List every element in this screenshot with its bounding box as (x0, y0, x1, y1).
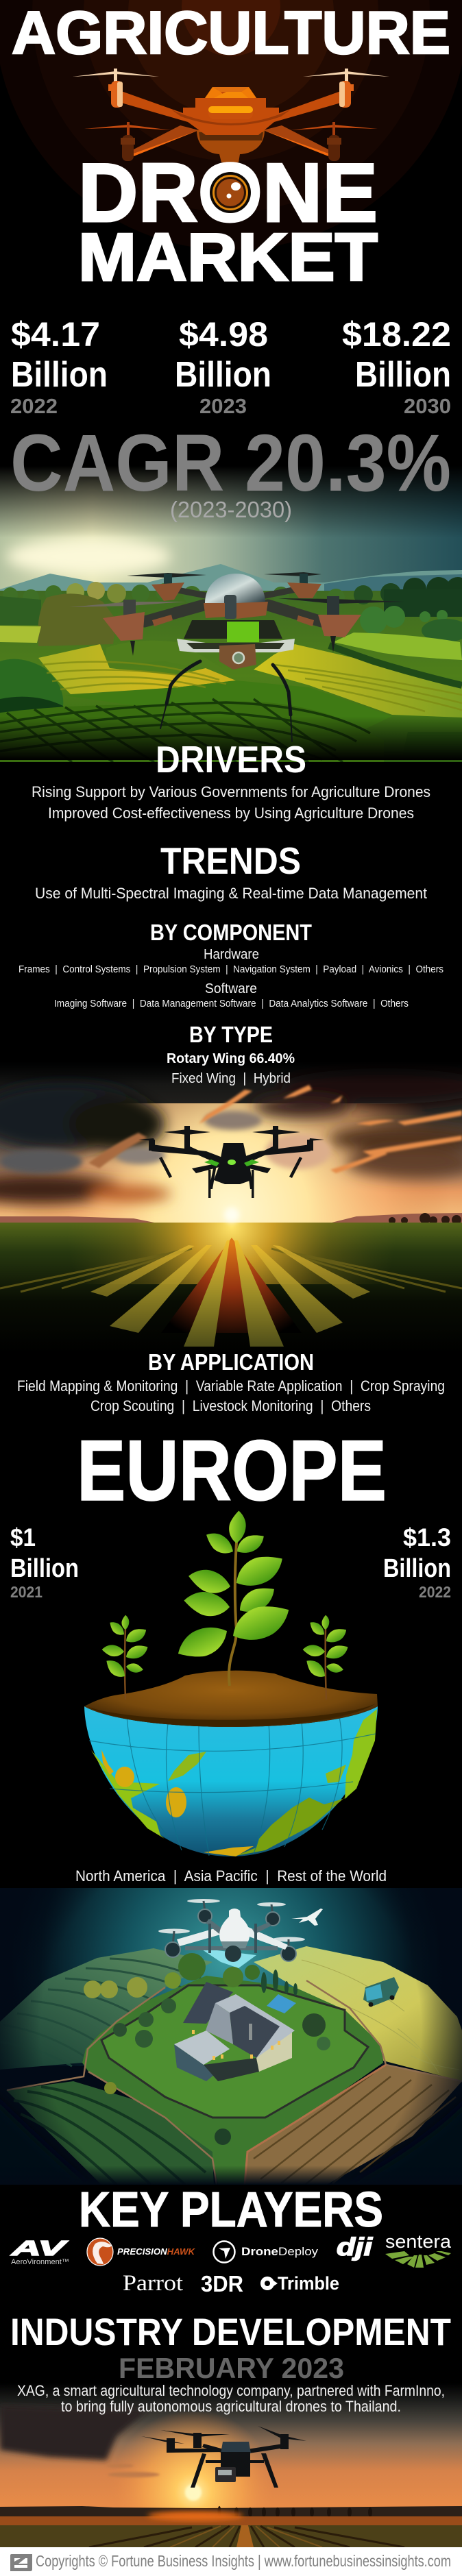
collar right (236, 602, 268, 619)
icon: Fortune Business Insights logo (10, 2554, 32, 2571)
sun (224, 1207, 239, 1223)
logo: AeroVironment: AV (10, 2236, 68, 2260)
trees (84, 1953, 330, 2145)
stat: 2022: 2022 (10, 394, 58, 418)
centre row glow (236, 2525, 254, 2547)
front motors (108, 81, 354, 108)
farmland base (0, 591, 462, 762)
text: drivers list (32, 783, 430, 822)
right sapling (302, 1615, 350, 1700)
right bushes (360, 606, 462, 642)
sky glow (0, 1103, 462, 1224)
panel: company logos (10, 2231, 452, 2296)
stat: 2030: Billion (355, 355, 451, 395)
panel: drone at sunset scene (0, 2383, 462, 2547)
logo: PrecisionHawk (87, 2238, 196, 2266)
drone: hovering silhouette (141, 2426, 306, 2488)
stat: Europe 2021 (10, 1523, 79, 1601)
panel: header background glow (0, 0, 462, 548)
logo: DJI: dji (337, 2233, 373, 2261)
hedge row (329, 646, 462, 685)
navy background (0, 1888, 462, 2185)
heading: Key players: KEY PLAYERS (79, 2183, 383, 2237)
crop rows (90, 1240, 370, 1347)
thin clouds (106, 2464, 160, 2477)
stat: 2022: $4.17 (11, 315, 100, 354)
sun glow (103, 2412, 288, 2508)
green band (65, 680, 392, 733)
rear rotors (84, 122, 378, 136)
stat: 2023 (175, 315, 271, 418)
text: drivers list: Improved Cost-effectiveness by Using Agriculture Drones (48, 805, 414, 822)
upper left yellow field (38, 644, 236, 694)
front arms and body (121, 87, 341, 135)
teal glow (0, 1888, 462, 2066)
left bush (0, 659, 63, 706)
text: drivers list: Rising Support by Various Governments for Agriculture Drones (32, 783, 430, 800)
text: application list (17, 1377, 445, 1414)
text: software segment: Imaging Software | Data Management Software | Data Analytics Software | Others (54, 998, 409, 1009)
panel: market size stats (10, 315, 451, 418)
treeline (3, 577, 462, 606)
bottom fade (0, 2166, 462, 2185)
right yellow field (254, 1946, 462, 2081)
icon: small plane (291, 1909, 323, 1926)
bowl shading (199, 132, 263, 140)
text: development description (17, 2382, 445, 2415)
olive tree clump (38, 593, 117, 646)
logo: Sentera (385, 2231, 452, 2268)
text: hardware segment (19, 947, 443, 975)
stat: 2023: 2023 (199, 394, 247, 418)
sky (0, 1061, 462, 1224)
panel: sunset field scene with drone (0, 1061, 462, 1354)
icon: orange drone illustration (73, 69, 389, 162)
panel: isometric farm scene with drone (0, 1888, 462, 2193)
continents (91, 1709, 377, 1856)
stat: Europe 2022 (383, 1523, 451, 1601)
front blades (73, 69, 389, 82)
blades (69, 572, 404, 607)
heading: By component: BY COMPONENT (150, 920, 312, 945)
stat: 2022 (10, 315, 108, 418)
stat: Europe 2021: Billion (10, 1554, 79, 1583)
text: software segment: Software (205, 981, 257, 996)
logo: Parrot: Parrot (123, 2271, 183, 2296)
text: hardware segment: Hardware (204, 947, 259, 962)
distant hills (0, 564, 462, 591)
left sapling (101, 1615, 150, 1700)
field warm highlights (170, 2526, 322, 2547)
arm patches (152, 615, 314, 626)
drone: white farm drone (158, 1899, 305, 1962)
stat: 2030: 2030 (404, 394, 451, 418)
stat: 2030 (342, 315, 451, 418)
logo: AeroVironment: AeroVironment™ (11, 2258, 69, 2266)
field (0, 1223, 462, 1354)
lit cloud streaks (88, 1085, 462, 1173)
field rows (89, 2526, 404, 2547)
dark edge under left bush (0, 696, 63, 713)
text: fixed wing and hybrid: Fixed Wing | Hybrid (171, 1071, 291, 1086)
left striped field (0, 1948, 212, 2070)
rotor pin tips (130, 636, 336, 656)
furrow glow (161, 1238, 302, 1333)
panel: first farm scene with drone (0, 466, 462, 762)
left meadow (0, 626, 41, 643)
stat: 2030: $18.22 (342, 315, 451, 354)
bottom fade to black (0, 716, 462, 760)
text: CAGR period: (2023-2030) (170, 497, 292, 522)
stat: Europe 2021: 2021 (10, 1583, 42, 1601)
right meadow (333, 633, 462, 660)
house (174, 1982, 295, 2081)
left field stripes (0, 1959, 206, 2066)
upper right yellow field (254, 644, 462, 717)
logo: DroneDeploy: Drone Deploy (241, 2245, 319, 2258)
rotor pods (103, 574, 361, 641)
orange field band (0, 2516, 462, 2526)
heading: Trends: TRENDS (160, 839, 301, 882)
sky (0, 2383, 462, 2508)
heading: By type: BY TYPE (189, 1022, 273, 1047)
dark cloud (0, 2405, 147, 2460)
visor (208, 106, 253, 119)
field glow (41, 1223, 425, 1284)
dome (205, 574, 265, 603)
globe grid (89, 1717, 376, 1856)
title: Market: MARKET (78, 219, 378, 295)
drone bowl (197, 130, 265, 162)
center hedge (106, 641, 233, 675)
side crop rows (0, 1249, 462, 1292)
rear motors (121, 135, 341, 161)
dark clouds (0, 1068, 462, 1204)
water patch (200, 1948, 256, 1968)
heading: Drivers: DRIVERS (156, 738, 306, 781)
distant cypress row (218, 2506, 372, 2517)
left trees (0, 596, 41, 625)
stat: Europe 2022: 2022 (419, 1583, 451, 1601)
field (0, 2525, 462, 2547)
tree line (0, 2506, 462, 2517)
distant hills (0, 1213, 462, 1223)
stat: 2022: Billion (11, 355, 108, 395)
icon: globe with soil and plants (84, 1510, 378, 1856)
logo: Trimble: Trimble (278, 2273, 339, 2294)
camera (219, 644, 256, 670)
text: other regions: North America | Asia Pacific | Rest of the World (75, 1867, 387, 1885)
sun haze (6, 539, 171, 574)
logo: Sentera: sentera (385, 2231, 452, 2252)
dirt paths (7, 1980, 462, 2185)
dark centre pillar (224, 595, 236, 619)
stat: Europe 2022: Billion (383, 1554, 451, 1583)
heading: Europe: EUROPE (77, 1423, 387, 1519)
brown field rows (254, 2073, 456, 2185)
top fade (0, 1061, 462, 1084)
white frame (177, 639, 295, 652)
collar (204, 603, 225, 618)
text: development description: to bring fully autonomous agricultural drones to Thailand. (61, 2398, 401, 2415)
solar panel (267, 1994, 296, 2013)
text: software segment (54, 981, 409, 1009)
lower corner shadows (0, 2087, 462, 2193)
title: Agriculture: AGRICULTURE (12, 0, 450, 66)
vignette (0, 1888, 462, 2185)
arms (145, 589, 321, 622)
crop rows (0, 699, 370, 762)
dark right trees (384, 589, 462, 617)
tree silhouettes (389, 1213, 461, 1225)
sky (0, 469, 462, 589)
frame interior (186, 643, 284, 649)
truck (363, 1977, 399, 2007)
top fade to black (0, 466, 462, 538)
green core (227, 622, 259, 642)
panel: footer (0, 2547, 462, 2576)
right hills (324, 574, 462, 591)
logo: 3DR: 3DR (201, 2271, 243, 2296)
drone: sunset silhouette (138, 1126, 324, 1198)
yard island (101, 1985, 368, 2118)
logo: DroneDeploy (214, 2241, 319, 2263)
logo: PrecisionHawk: PRECISIONHAWK (117, 2246, 196, 2257)
stat: 2023: Billion (175, 355, 271, 395)
text: date of development: FEBRUARY 2023 (119, 2352, 344, 2384)
stat: 2023: $4.98 (179, 315, 268, 354)
legs (160, 661, 292, 741)
logo: AeroVironment (10, 2236, 69, 2266)
text: rotary wing share: Rotary Wing 66.40% (167, 1051, 295, 1066)
sun (185, 2484, 202, 2501)
gray lit clouds (0, 1111, 331, 1174)
stat: Europe 2022: $1.3 (403, 1523, 451, 1551)
brown field (245, 2065, 462, 2186)
bottom right field (401, 732, 462, 762)
lower left crop rows (6, 2081, 214, 2186)
machinery (184, 620, 282, 639)
crop rows field (0, 701, 384, 762)
main plant (173, 1510, 295, 1686)
text: trends: Use of Multi-Spectral Imaging & Real-time Data Management (35, 885, 427, 902)
soil (84, 1671, 378, 1727)
right field lines (302, 1960, 459, 2073)
rear arms (134, 125, 328, 156)
heading: By application: BY APPLICATION (148, 1349, 314, 1375)
text: application list: Crop Scouting | Livestock Monitoring | Others (90, 1397, 371, 1414)
soil rim (87, 1704, 376, 1727)
green lawn (82, 1976, 383, 2185)
stat: Europe 2021: $1 (10, 1523, 36, 1551)
orange reflection (147, 2511, 243, 2520)
lower left stripes (14, 2087, 206, 2185)
drone: farm drone (69, 572, 404, 741)
title: Drone with camera lens: DRONE (78, 146, 378, 239)
yellow rows (42, 662, 462, 711)
globe bowl (84, 1706, 378, 1856)
